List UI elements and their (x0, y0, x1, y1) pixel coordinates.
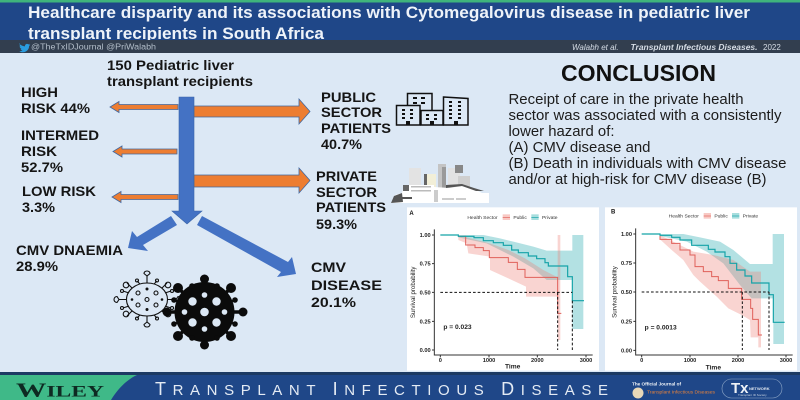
TxNetwork logo: Transplant ID Society (738, 393, 767, 397)
TxNetwork logo: Tx (731, 380, 749, 397)
label: private sector: SECTOR (316, 184, 377, 200)
legend B: Private (743, 214, 758, 220)
TxNetwork logo: NETWORK (749, 386, 770, 391)
chart A: survival curves (407, 207, 599, 371)
label: public sector: PATIENTS (321, 120, 391, 136)
arrow: to private sector (194, 168, 310, 193)
axis titles A: Time (505, 364, 521, 371)
label: private sector: PATIENTS (316, 199, 386, 215)
median lines B (642, 292, 769, 350)
citation: Walabh et al. (572, 43, 619, 52)
curve: private A (440, 235, 584, 301)
y tick labels B: 0.75 (621, 261, 632, 267)
arrow: to intermediate risk (113, 146, 177, 157)
conclusion text: lower hazard of: (508, 124, 614, 140)
social handles: @TheTxIDJournal @PriWalabh (31, 42, 156, 52)
icon: solid virus (162, 274, 248, 350)
conclusion text: (B) Death in individuals with CMV disease (508, 156, 786, 172)
y tick labels B: 1.00 (621, 232, 632, 238)
legend B: Public (714, 214, 728, 220)
x tick labels B: 3000 (780, 358, 792, 364)
label: high risk: RISK 44% (21, 100, 91, 116)
official journal note: The Official Journal of (632, 382, 681, 388)
x tick labels B: 0 (640, 358, 643, 364)
curve: public A (458, 236, 561, 313)
chart B: survival curves (605, 207, 797, 371)
panel letter A: A (409, 211, 414, 217)
y tick labels A: 1.00 (420, 233, 431, 239)
y tick labels B: 0.25 (621, 319, 632, 325)
p-value B: p = 0.0013 (645, 325, 677, 332)
heading: cohort: 150 Pediatric liver (107, 57, 235, 73)
x tick labels A: 3000 (580, 358, 592, 364)
label: public sector: 40.7% (321, 136, 363, 152)
social and citation bar (0, 40, 800, 53)
x tick labels B: 1000 (684, 358, 696, 364)
y tick labels A: 0.75 (420, 262, 431, 268)
label: private sector: 59.3% (316, 216, 358, 232)
arrow: to CMV DNAemia (128, 216, 177, 251)
confidence band: public A (458, 235, 560, 340)
y tick labels B: 0.00 (621, 348, 632, 354)
citation: 2022 (763, 43, 781, 52)
confidence band: public B (660, 235, 761, 347)
label: intermediate risk: 52.7% (21, 159, 64, 175)
axis titles B: Time (706, 364, 721, 371)
x tick labels A: 1000 (483, 358, 495, 364)
conclusion text: sector was associated with a consistently (508, 108, 782, 124)
heading: conclusion: CONCLUSION (561, 60, 716, 86)
p-value A: p = 0.023 (443, 324, 472, 331)
official journal note: Transplant Infectious Diseases (647, 390, 716, 394)
legend A: Health Sector (467, 215, 498, 221)
icon: twitter bird (19, 44, 30, 52)
label: low risk: 3.3% (22, 199, 56, 215)
legend B (669, 213, 758, 220)
conclusion text: and/or at high-risk for CMV disease (B) (508, 172, 766, 188)
title: transplant recipients in South Africa (28, 25, 325, 43)
axes A (432, 229, 593, 357)
y tick labels B: 0.50 (621, 290, 632, 296)
TxNetwork logo (722, 379, 782, 398)
x tick labels A: 0 (439, 358, 442, 364)
arrow: to low risk (112, 192, 178, 202)
y tick labels A: 0.25 (420, 319, 431, 325)
legend B: Health Sector (669, 214, 699, 220)
label: public sector: PUBLIC (321, 89, 376, 105)
footer band (0, 372, 800, 400)
citation: Transplant Infectious Diseases. (630, 43, 758, 52)
label: low risk: LOW RISK (22, 183, 96, 199)
median lines A (440, 292, 572, 350)
arrow: to high risk (110, 102, 178, 112)
conclusion text: (A) CMV disease and (508, 140, 650, 156)
axis titles B (611, 265, 721, 371)
label: private sector: PRIVATE (316, 168, 377, 184)
label: public sector: SECTOR (321, 104, 382, 120)
official journal note (632, 382, 716, 398)
label: CMV DNAemia: 28.9% (16, 258, 59, 274)
label: intermediate risk: INTERMED (21, 127, 99, 143)
label: CMV DNAemia: CMV DNAEMIA (16, 242, 123, 258)
axis titles B: Survival probability (611, 265, 618, 318)
axis titles A (410, 266, 521, 371)
y tick labels A: 0.00 (420, 348, 431, 354)
axis titles A: Survival probability (410, 266, 417, 318)
icon: private sector city (391, 164, 489, 203)
legend A: Public (513, 215, 527, 221)
journal name: T RANSPLANT I NFECTIOUS D ISEASE (155, 379, 608, 399)
arrow: to public sector (194, 99, 310, 124)
curve: private B (642, 234, 785, 322)
icon: public sector buildings (396, 94, 468, 125)
x tick labels B: 2000 (732, 358, 744, 364)
conclusion text: Receipt of care in the private health (508, 92, 744, 108)
label: CMV disease: DISEASE (311, 277, 382, 293)
legend A: Private (542, 215, 558, 221)
curve: public B (660, 236, 762, 335)
icon: outlined virus (114, 271, 181, 327)
label: high risk: HIGH (21, 84, 58, 100)
label: intermediate risk: RISK (21, 143, 57, 159)
label: CMV disease: CMV (311, 259, 347, 275)
title: Healthcare disparity and its associations with Cytomegalovirus disease in pediatric liver (28, 4, 751, 22)
y tick labels A: 0.50 (420, 290, 431, 296)
axes B (633, 228, 793, 357)
heading: cohort: transplant recipients (107, 73, 253, 89)
title banner (0, 0, 800, 43)
confidence band: private A (458, 235, 583, 329)
panel letter B: B (611, 210, 616, 216)
arrow: to CMV disease (197, 216, 296, 277)
confidence band: private B (660, 234, 784, 344)
x tick labels A: 2000 (531, 358, 544, 364)
label: CMV disease: 20.1% (311, 294, 357, 310)
arrow: main blue stem (172, 97, 202, 224)
legend A (467, 214, 558, 221)
